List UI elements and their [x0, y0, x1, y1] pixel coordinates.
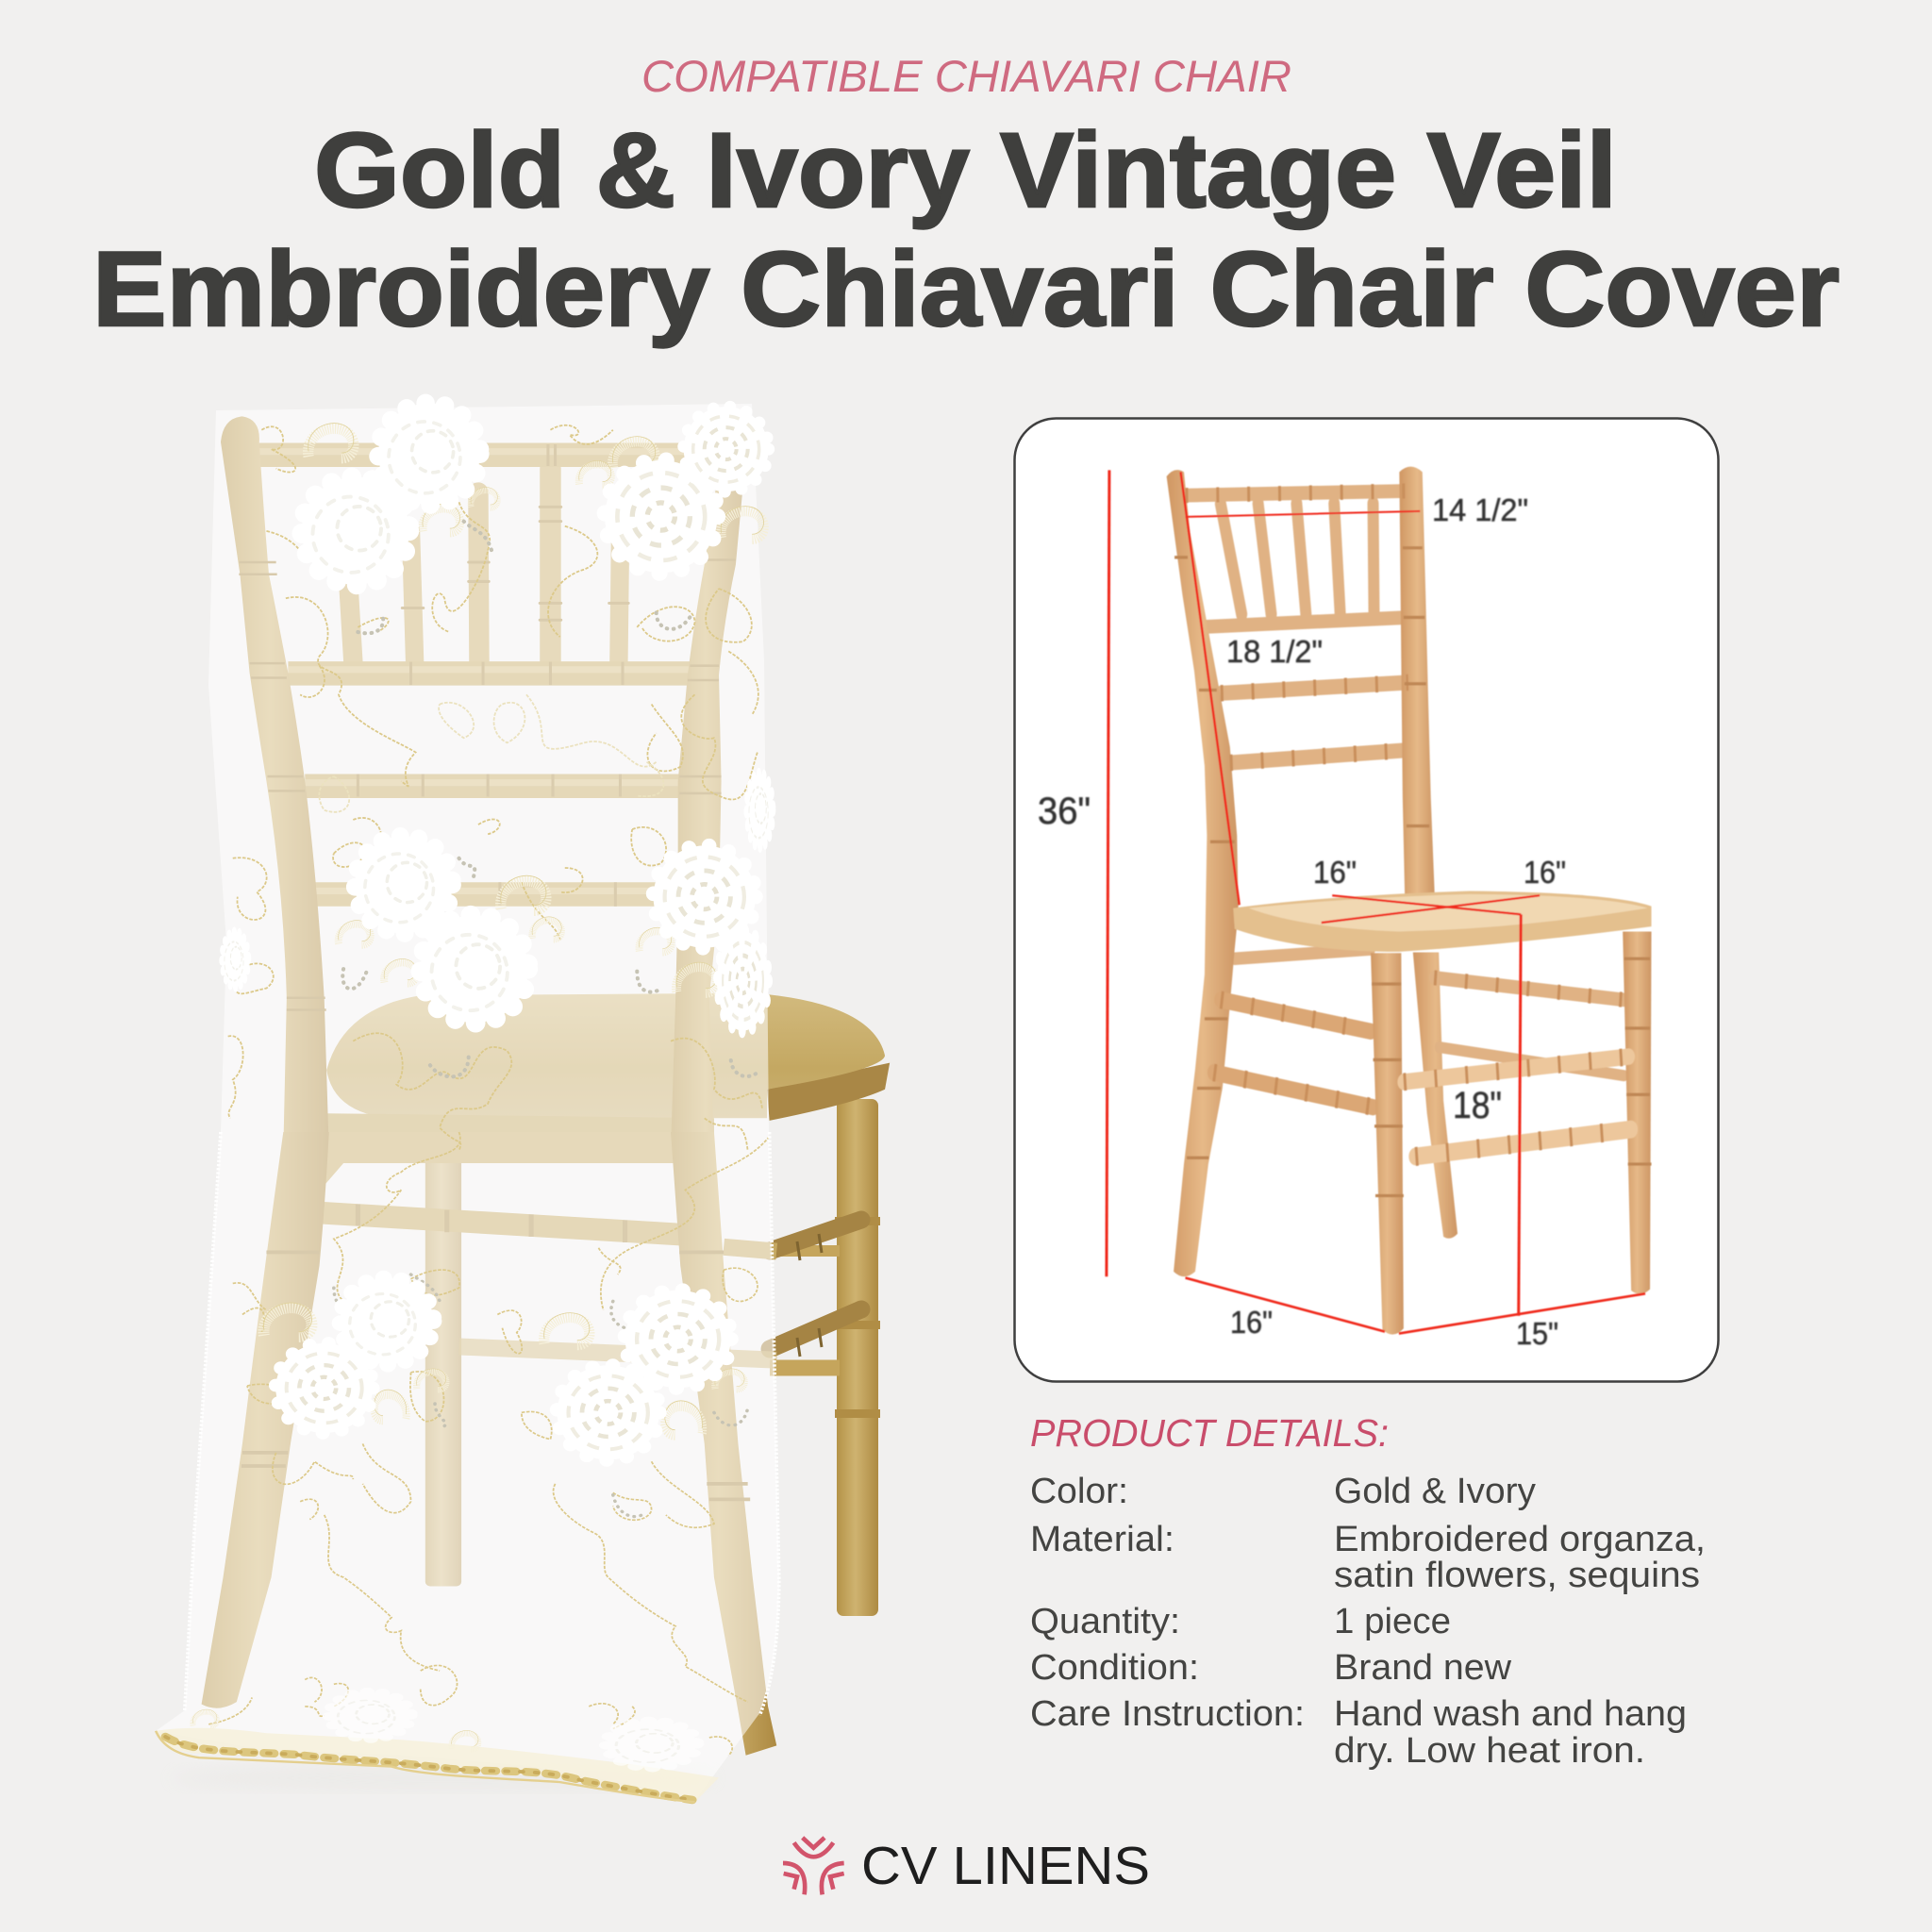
crescents and sequins: upper veil [308, 424, 764, 1076]
crescents, sequins and scalloped gold hem: lower veil [156, 1132, 779, 1802]
title: Embroidery Chiavari Chair Cover [92, 230, 1840, 348]
dimension labels: 16" [1313, 855, 1357, 890]
wooden chair illustration [1107, 467, 1652, 1335]
seat [325, 993, 890, 1151]
product details table: Hand wash and hang [1334, 1694, 1687, 1734]
brand logo [783, 1836, 1150, 1896]
product details table [1030, 1472, 1706, 1771]
front legs [202, 1132, 329, 1708]
veil: sheer organza [156, 404, 779, 1802]
back-left leg [1413, 953, 1457, 1239]
product details table: 1 piece [1334, 1602, 1451, 1641]
product details table: Embroidered organza, [1334, 1520, 1706, 1559]
flowers: lower veil [275, 1278, 731, 1768]
photo: chair with embroidered veil [156, 403, 890, 1802]
spindles and back rails [1186, 491, 1624, 1075]
embroidery: upper veil [228, 425, 762, 1151]
product details table: Brand new [1334, 1648, 1512, 1688]
embroidery: lower veil [208, 1132, 770, 1756]
chair: lower part under veil [202, 1132, 776, 1756]
product details table: Material: [1030, 1520, 1174, 1559]
product details table: dry. Low heat iron. [1334, 1731, 1645, 1771]
leg stretchers [1213, 1000, 1374, 1108]
front stretchers [1404, 1057, 1631, 1157]
chair: upper part under veil [221, 416, 890, 1151]
dimension labels: 15" [1516, 1316, 1558, 1351]
title: Gold & Ivory Vintage Veil [314, 111, 1617, 229]
dimension labels: 14 1/2" [1432, 492, 1528, 527]
icon: CV Linens mark [783, 1838, 844, 1894]
stretchers [309, 1204, 776, 1360]
measurement lines [1107, 470, 1645, 1334]
flowers: upper veil [222, 403, 774, 1031]
product details table: Color: [1030, 1472, 1128, 1511]
product details table: Gold & Ivory [1334, 1472, 1536, 1511]
dimension labels: 18" [1453, 1085, 1502, 1126]
apron [322, 1132, 675, 1186]
back posts [1167, 470, 1239, 1276]
spindles [346, 469, 628, 661]
dimension labels: 18 1/2" [1226, 634, 1323, 669]
dimension labels: 16" [1230, 1305, 1273, 1340]
back posts [221, 416, 748, 1151]
back-left leg [425, 1132, 461, 1586]
product details heading: PRODUCT DETAILS: [1030, 1411, 1389, 1455]
joints and turned rings [1174, 548, 1652, 1196]
product details table: Quantity: [1030, 1602, 1180, 1641]
front and rear legs [1371, 953, 1404, 1335]
eyebrow heading: COMPATIBLE CHIAVARI CHAIR [641, 51, 1291, 101]
chair: solid gold back leg and stretchers [770, 1099, 880, 1616]
panel: chair dimensions diagram [1015, 419, 1719, 1381]
floor shadow [170, 1765, 717, 1791]
product details table: satin flowers, sequins [1334, 1556, 1700, 1595]
dimension labels: 36" [1038, 791, 1091, 832]
dimension labels: 16" [1524, 855, 1566, 890]
title [92, 111, 1840, 348]
bamboo nodes on rails [1186, 491, 1631, 1157]
seat [1233, 891, 1652, 952]
product details table: Condition: [1030, 1648, 1199, 1688]
dimension labels [1038, 492, 1566, 1351]
rails [259, 444, 690, 907]
wordmark: CV LINENS [861, 1836, 1150, 1896]
product details table: Care Instruction: [1030, 1694, 1305, 1734]
card [1015, 419, 1719, 1381]
